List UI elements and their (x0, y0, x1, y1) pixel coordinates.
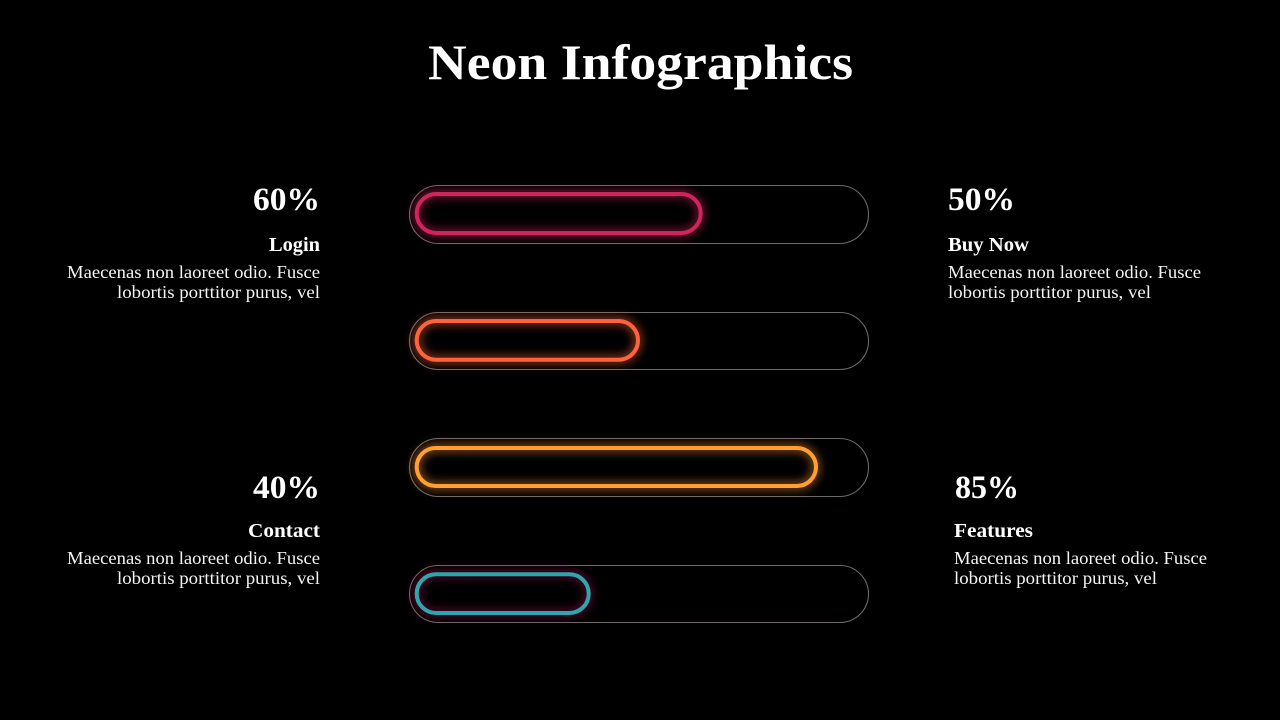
text block: Login 60%: lobortis porttitor purus, vel (117, 282, 320, 302)
text block: Contact 40%: Contact (248, 520, 320, 542)
text block: Contact 40%: Maecenas non laoreet odio. Fusce (67, 548, 320, 568)
text block: Buy Now 50%: 50% (948, 182, 1015, 218)
progress bar: amber (410, 438, 868, 496)
title: Neon Infographics (428, 34, 853, 90)
text block: Login 60%: 60% (253, 182, 320, 218)
text block: Features 85%: lobortis porttitor purus, vel (954, 568, 1157, 588)
text block: Login 60%: Login (269, 234, 320, 256)
text block: Features 85%: Maecenas non laoreet odio. Fusce (954, 548, 1207, 568)
text block: Buy Now 50%: Buy Now (948, 234, 1030, 256)
text block: Buy Now 50%: lobortis porttitor purus, vel (948, 282, 1151, 302)
progress bar: teal (410, 566, 868, 622)
text block: Contact 40%: lobortis porttitor purus, vel (117, 568, 320, 588)
text block: Features 85% (954, 470, 1207, 588)
text block: Buy Now 50% (948, 182, 1201, 302)
text block: Login 60% (67, 182, 320, 302)
text block: Features 85%: Features (954, 520, 1033, 542)
text block: Login 60%: Maecenas non laoreet odio. Fusce (67, 262, 320, 282)
text block: Contact 40%: 40% (253, 470, 320, 506)
text block: Features 85%: 85% (955, 470, 1019, 506)
progress bar: orange-red (410, 312, 868, 370)
text block: Contact 40% (67, 470, 320, 588)
text block: Buy Now 50%: Maecenas non laoreet odio. Fusce (948, 262, 1201, 282)
progress bar: pink (410, 186, 868, 244)
